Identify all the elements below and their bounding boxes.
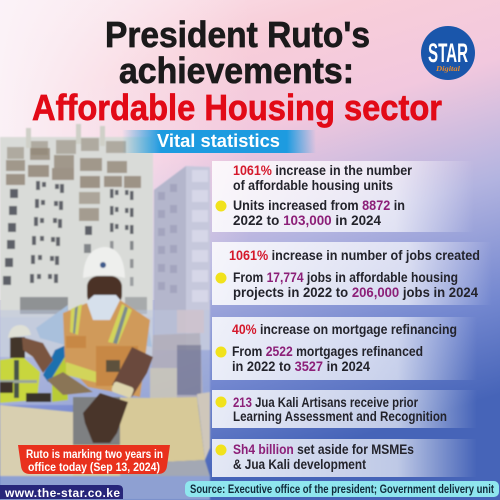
- panel: housing units: [212, 161, 474, 232]
- panel: MSMEs: [212, 439, 477, 477]
- callout: two years in office: office today (Sep 13, 2024): [28, 460, 160, 474]
- main building under construction: [0, 124, 153, 357]
- stat detail: From 2522 mortgages refinanced: [232, 344, 423, 359]
- background worker on the right: [150, 310, 204, 398]
- blue haze at base of buildings: [0, 310, 210, 405]
- logo: Star Digital: [421, 26, 475, 80]
- president: helmet, face, vest and arms: [22, 247, 153, 398]
- stat detail: Units increased from 8872 in: [233, 198, 405, 213]
- bullet: [216, 200, 226, 212]
- website bar: www.the-star.co.ke: [4, 486, 120, 500]
- blue-shirted helper: [43, 345, 66, 382]
- neck and face: [87, 276, 122, 306]
- bullet: [216, 396, 226, 408]
- lower forearm: [112, 347, 153, 397]
- stat detail: From 17,774 jobs in affordable housing: [233, 270, 458, 285]
- stat text: 213 Jua Kali Artisans receive prior: [233, 395, 419, 410]
- title: President Ruto's: [105, 14, 370, 55]
- photo: construction site and worker: [0, 124, 210, 500]
- bullet: [216, 346, 226, 358]
- panel: mortgages: in 2022 to 3527 in 2024: [232, 359, 370, 374]
- logo: Star Digital: Digital: [435, 65, 460, 73]
- shirt collar: [86, 295, 122, 322]
- stone blocks: [0, 392, 210, 476]
- callout: two years in office: [18, 445, 170, 474]
- stat headline: 1061% increase in number of jobs created: [229, 248, 480, 263]
- left worker: [0, 325, 51, 403]
- logo: Star Digital: STAR: [428, 38, 468, 68]
- helmet: [83, 247, 125, 278]
- sleeves: [36, 305, 68, 345]
- panel: jobs: projects in 2022 to 206,000 jobs in 2024: [233, 285, 478, 300]
- panel: MSMEs: & Jua Kali development: [233, 457, 366, 472]
- panel: jobs: [212, 242, 492, 305]
- vest: [63, 300, 150, 397]
- base fade: [0, 476, 210, 500]
- hand: [83, 393, 128, 443]
- callout: two years in office: Ruto is marking two years in: [26, 447, 163, 461]
- banner: vital statistics: Vital statistics: [157, 131, 280, 151]
- bullet: [216, 272, 226, 284]
- panel: mortgages: [212, 317, 477, 380]
- title: achievements:: [119, 50, 354, 91]
- bullet: [216, 444, 226, 456]
- second building: [154, 166, 210, 350]
- mortar on trowel: [47, 372, 93, 395]
- raised forearm: [22, 337, 53, 373]
- panel: housing units: 2022 to 103,000 in 2024: [233, 213, 381, 228]
- panel: housing units: of affordable housing units: [233, 178, 393, 193]
- panel: artisans: Learning Assessment and Recognition: [233, 409, 447, 424]
- title: Affordable Housing sector: [32, 87, 442, 128]
- stat headline: 40% increase on mortgage refinancing: [232, 322, 457, 337]
- banner: vital statistics: [122, 130, 316, 153]
- stat headline: 1061% increase in the number: [233, 163, 413, 178]
- trowel: [73, 397, 120, 445]
- panel: artisans: [212, 390, 477, 428]
- title: [32, 14, 442, 128]
- watch: [111, 381, 134, 398]
- stat text: Sh4 billion set aside for MSMEs: [233, 442, 414, 457]
